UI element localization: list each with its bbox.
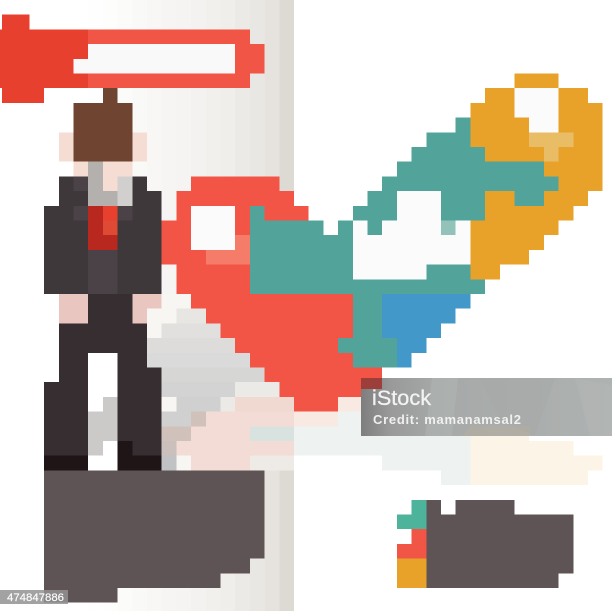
battery bar icon: outline — [88, 29, 265, 88]
ring centre — [514, 88, 559, 132]
battery bar icon: empty interior — [74, 44, 235, 74]
necktie — [88, 206, 118, 250]
watermark credit: Credit: mamanamsal2 — [373, 412, 521, 427]
suit jacket — [44, 176, 162, 294]
shoes — [44, 441, 162, 470]
collar — [88, 162, 118, 206]
hands — [59, 294, 162, 323]
ring highlight — [529, 132, 573, 162]
shadow: pale reflection of the check mark — [294, 397, 603, 485]
icon: red heart — [162, 176, 382, 412]
watermark banner — [361, 378, 612, 436]
teal tab — [397, 500, 426, 529]
figure: businessman — [44, 88, 162, 470]
heart highlight — [206, 235, 250, 265]
ears and neck — [59, 132, 147, 191]
red tab — [397, 529, 426, 559]
panel: stepped grey background column — [74, 0, 294, 611]
icon: blue wedge — [382, 294, 470, 368]
orange tab — [397, 559, 426, 588]
gap between legs — [88, 353, 118, 470]
head with stem — [74, 88, 132, 162]
white wing — [353, 191, 470, 279]
watermark logo: iStock — [372, 385, 431, 410]
heart eye — [191, 206, 235, 250]
image id label: 474847886 — [7, 592, 64, 604]
icon: orange ring — [470, 74, 603, 279]
pale teal pixel — [441, 220, 456, 235]
dark base block — [44, 470, 265, 603]
small dark block with colour tabs — [397, 500, 573, 588]
battery bar icon: left end — [0, 15, 265, 103]
trousers — [44, 294, 162, 456]
shadow: grey reflection beside the figure — [147, 294, 294, 470]
icon: teal bird body — [250, 118, 559, 367]
